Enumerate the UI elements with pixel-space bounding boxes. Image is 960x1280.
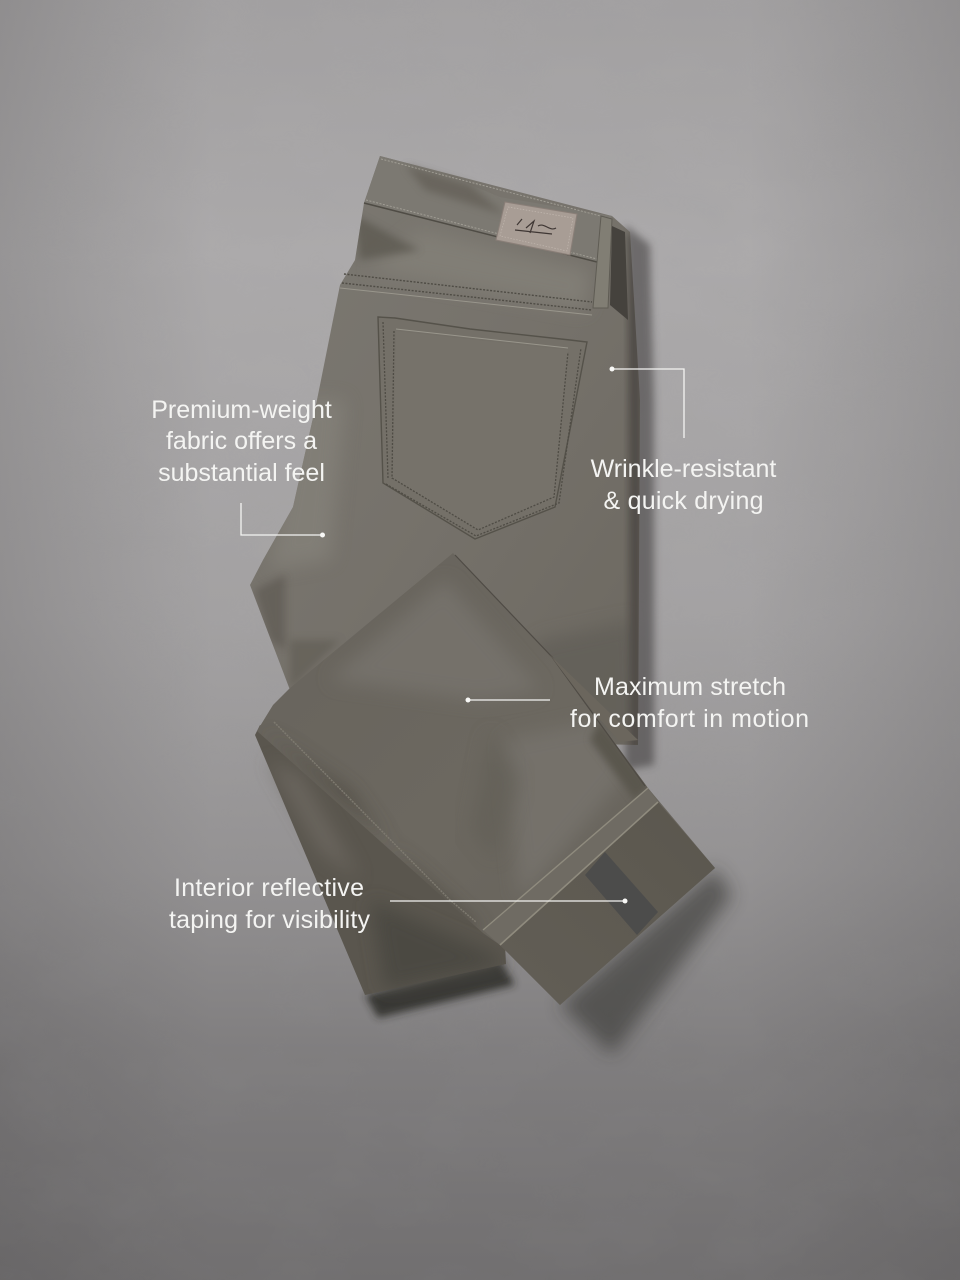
waistband [364,156,612,262]
callout text: Interior reflective [174,874,364,902]
callout text: Wrinkle-resistant [591,455,776,483]
callout text: for comfort in motion [570,705,809,733]
callout text: Premium-weight [151,396,332,424]
yoke stitching [344,274,592,302]
callout text [570,673,809,733]
folded pants photo [250,156,715,1005]
callout text [151,396,332,487]
upper pants body [250,156,642,760]
reflective tape [585,852,658,935]
callout text [591,455,776,515]
callout: reflective taping [169,874,628,934]
callout text [169,874,370,934]
under leg [255,725,506,995]
callout: wrinkle-resistant [591,366,776,515]
leather label [496,202,577,255]
callout text: Maximum stretch [594,673,786,701]
pants shadow [365,225,732,1055]
back pocket [378,317,587,539]
callout: premium-weight fabric [151,396,332,538]
leader line [610,366,684,438]
leader line [241,503,325,538]
folded front leg [257,553,715,1005]
callout text: substantial feel [158,459,325,487]
hem flap [550,655,638,742]
cuff [483,788,658,945]
callout text: & quick drying [604,487,764,515]
callout text: fabric offers a [166,427,317,455]
belt loop [593,216,612,308]
leader line [466,698,550,702]
callout text: taping for visibility [169,906,370,934]
leader line [390,898,628,904]
callout: maximum stretch [466,673,809,733]
